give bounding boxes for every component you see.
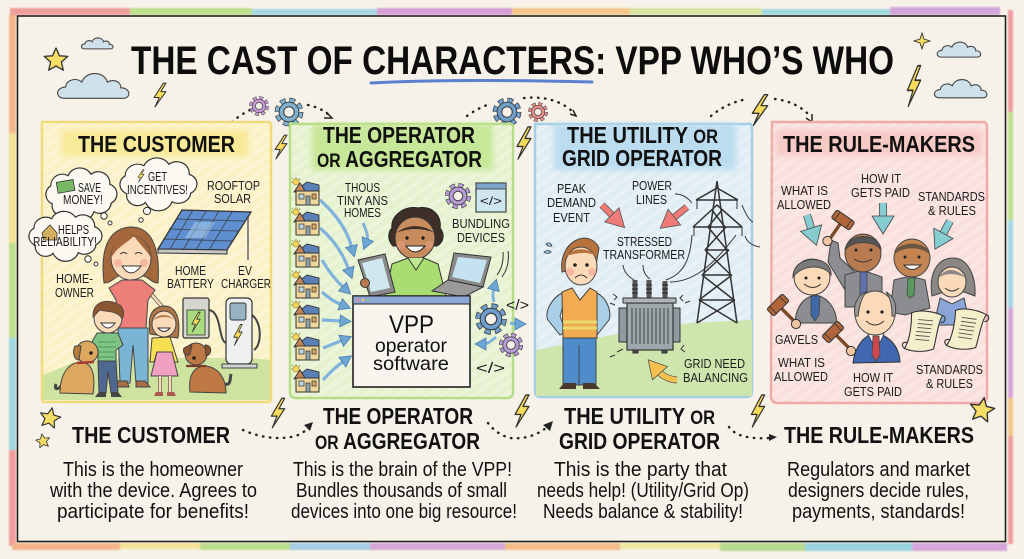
lower labels: GAVELS	[775, 332, 818, 347]
bottom section: the operator: Bundles thousands of small	[296, 480, 507, 502]
bottom section: the utility: needs help! (Utility/Grid Op)	[537, 480, 749, 502]
bottom section: the rule-makers: payments, standards!	[792, 501, 965, 523]
gears, code and arrows around software: </>	[506, 297, 529, 314]
bottom stars	[35, 396, 996, 448]
panel: the customer: BATTERY	[167, 276, 214, 291]
official raised gavel	[818, 207, 882, 307]
official front	[822, 291, 900, 363]
thought bubbles	[29, 158, 197, 266]
title underline	[371, 81, 592, 83]
panel background	[290, 124, 513, 398]
gears, code and arrows around software: </>	[476, 360, 505, 377]
bundling devices icons and label	[448, 183, 510, 277]
ground	[536, 320, 752, 396]
worried utility worker	[544, 238, 610, 389]
VPP operator software window	[353, 296, 470, 387]
panel: the operator or aggregator: HOMES	[344, 205, 381, 220]
heading highlight	[554, 124, 736, 170]
panel: the rule-makers: ALLOWED	[774, 369, 828, 384]
panel: the operator or aggregator	[290, 122, 529, 398]
thought bubbles: INCENTIVES!	[127, 182, 188, 197]
tablet	[358, 254, 395, 297]
connector: operator to utility with gears	[467, 98, 576, 123]
panel: the rule-makers: STANDARDS	[916, 362, 983, 377]
panel: the rule-makers: STANDARDS	[918, 189, 985, 204]
panel background	[42, 122, 271, 402]
row of homes	[291, 177, 319, 392]
girl	[149, 306, 179, 396]
description: This is the party that	[554, 459, 727, 481]
VPP operator software window: software	[373, 354, 449, 375]
dotted arrow: operator to utility	[488, 421, 553, 438]
panel: the operator or aggregator: OR AGGREGATOR	[317, 146, 482, 172]
panel: the customer: OWNER	[55, 285, 94, 300]
solar panel	[158, 210, 251, 260]
panel: the rule-makers: HOW IT	[861, 171, 901, 186]
panel: the utility or grid operator: BALANCING	[683, 370, 748, 385]
heading highlight	[312, 124, 493, 170]
panel: the rule-makers: & RULES	[926, 376, 973, 391]
bottom section: the rule-makers	[784, 422, 974, 523]
bundling devices icons and label: BUNDLING	[452, 216, 510, 231]
transformer	[610, 280, 690, 357]
panel: the customer: CHARGER	[221, 276, 271, 291]
bottom section: the customer: with the device. Agrees to	[49, 480, 257, 502]
gears, code and arrows around software	[476, 288, 529, 377]
right dog	[183, 343, 231, 393]
panel: the rule-makers: HOW IT	[853, 370, 893, 385]
panel: the rule-makers: ALLOWED	[777, 197, 831, 212]
stressed transformer label: STRESSED	[617, 234, 672, 249]
panel: the rule-makers: & RULES	[928, 203, 976, 218]
dotted arrow: utility to rule-makers	[729, 427, 777, 441]
peak demand label: PEAK	[557, 181, 586, 196]
panel: the customer: HOME-	[56, 271, 93, 286]
power lines label: POWER	[632, 178, 672, 193]
heading: THE UTILITY OR	[564, 403, 715, 429]
teal arrows	[807, 203, 950, 236]
heading: THE UTILITY OR	[567, 122, 718, 148]
connector: utility to rule-makers with bolt	[711, 95, 812, 125]
panel: the utility or grid operator	[535, 122, 760, 397]
panel: the rule-makers: WHAT IS	[778, 355, 825, 370]
bundling devices icons and label: DEVICES	[457, 230, 505, 245]
panel: the utility or grid operator: DEMAND	[547, 195, 596, 210]
bottom section: the rule-makers: designers decide rules,	[788, 480, 969, 502]
panel: the utility or grid operator: EVENT	[553, 210, 590, 225]
panel: the rule-makers: GETS PAID	[844, 384, 902, 399]
scrolls	[902, 307, 990, 353]
VPP operator software window: operator	[375, 336, 448, 357]
heading: THE OPERATOR	[323, 403, 473, 429]
bottom section: the customer: participate for benefits!	[57, 501, 249, 523]
panel: the rule-makers: GETS PAID	[851, 185, 910, 200]
transmission tower	[693, 181, 760, 323]
header doodles: clouds, stars, bolts	[44, 33, 987, 107]
official left	[767, 259, 837, 329]
thought bubbles: RELIABILITY!	[33, 234, 97, 249]
VPP operator software window: VPP	[389, 311, 434, 339]
down arrow	[363, 223, 368, 241]
side bolts	[271, 127, 765, 428]
dotted arrow: customer to operator	[243, 422, 313, 438]
description: This is the brain of the VPP!	[293, 459, 512, 481]
official smiling right	[890, 239, 930, 315]
red arrow left	[602, 205, 614, 217]
woman homeowner	[103, 227, 165, 387]
boy	[92, 301, 124, 397]
grid need balancing label: GRID NEED	[684, 356, 745, 371]
official woman	[931, 258, 975, 325]
bottom section: the operator	[291, 403, 517, 523]
panel: the utility or grid operator: LINES	[636, 192, 667, 207]
panel: the operator or aggregator: TINY ANS	[337, 193, 388, 208]
panel: the rule-makers	[767, 122, 990, 403]
EV charger	[222, 298, 260, 368]
panel background	[771, 122, 987, 403]
arrows from homes to software	[320, 200, 352, 380]
bottom section: the operator: devices into one big resource!	[291, 501, 517, 523]
heading: THE CUSTOMER	[78, 131, 235, 157]
bottom section: the utility: Needs balance & stability!	[543, 501, 743, 523]
red arrow right	[672, 207, 687, 219]
panel background	[535, 124, 752, 397]
heading highlight	[62, 130, 248, 156]
device labels: HOME	[175, 263, 206, 278]
bottom section: the utility	[537, 403, 749, 523]
heading: THE CUSTOMER	[72, 422, 230, 448]
operator person	[385, 208, 446, 296]
ground	[43, 358, 270, 400]
yellow arrow	[658, 371, 677, 380]
heading highlight	[776, 130, 982, 156]
panel: the customer: SOLAR	[214, 191, 251, 206]
description: This is the homeowner	[63, 459, 243, 481]
thought bubbles: SAVE	[78, 180, 101, 195]
heading: THE RULE-MAKERS	[784, 422, 974, 448]
title: THE CAST OF CHARACTERS: VPP WHO’S WHO	[131, 39, 894, 83]
top labels: WHAT IS	[781, 183, 828, 198]
left dog	[55, 341, 98, 394]
connector: customer to operator with gears	[232, 98, 332, 123]
bottom section: the operator: OR AGGREGATOR	[315, 428, 480, 454]
heading: THE OPERATOR	[323, 122, 475, 148]
thought bubbles: HELPS	[58, 222, 89, 237]
panel: the utility or grid operator: TRANSFORMER	[603, 247, 685, 262]
bundling devices icons and label: </>	[480, 194, 502, 208]
homes label: THOUS	[345, 180, 380, 195]
rooftop solar label: ROOFTOP	[207, 178, 260, 193]
thought bubbles: GET	[148, 169, 167, 184]
home battery	[183, 298, 226, 343]
bottom section: the utility: GRID OPERATOR	[559, 428, 720, 454]
thought bubbles: MONEY!	[63, 192, 103, 207]
panel: the customer: EV	[238, 263, 252, 278]
panel: the customer	[29, 122, 271, 402]
panel: the utility or grid operator: GRID OPERATOR	[562, 145, 722, 171]
description: Regulators and market	[787, 459, 970, 481]
laptop	[432, 253, 491, 297]
bottom section: the customer	[49, 422, 257, 523]
heading: THE RULE-MAKERS	[783, 131, 975, 157]
